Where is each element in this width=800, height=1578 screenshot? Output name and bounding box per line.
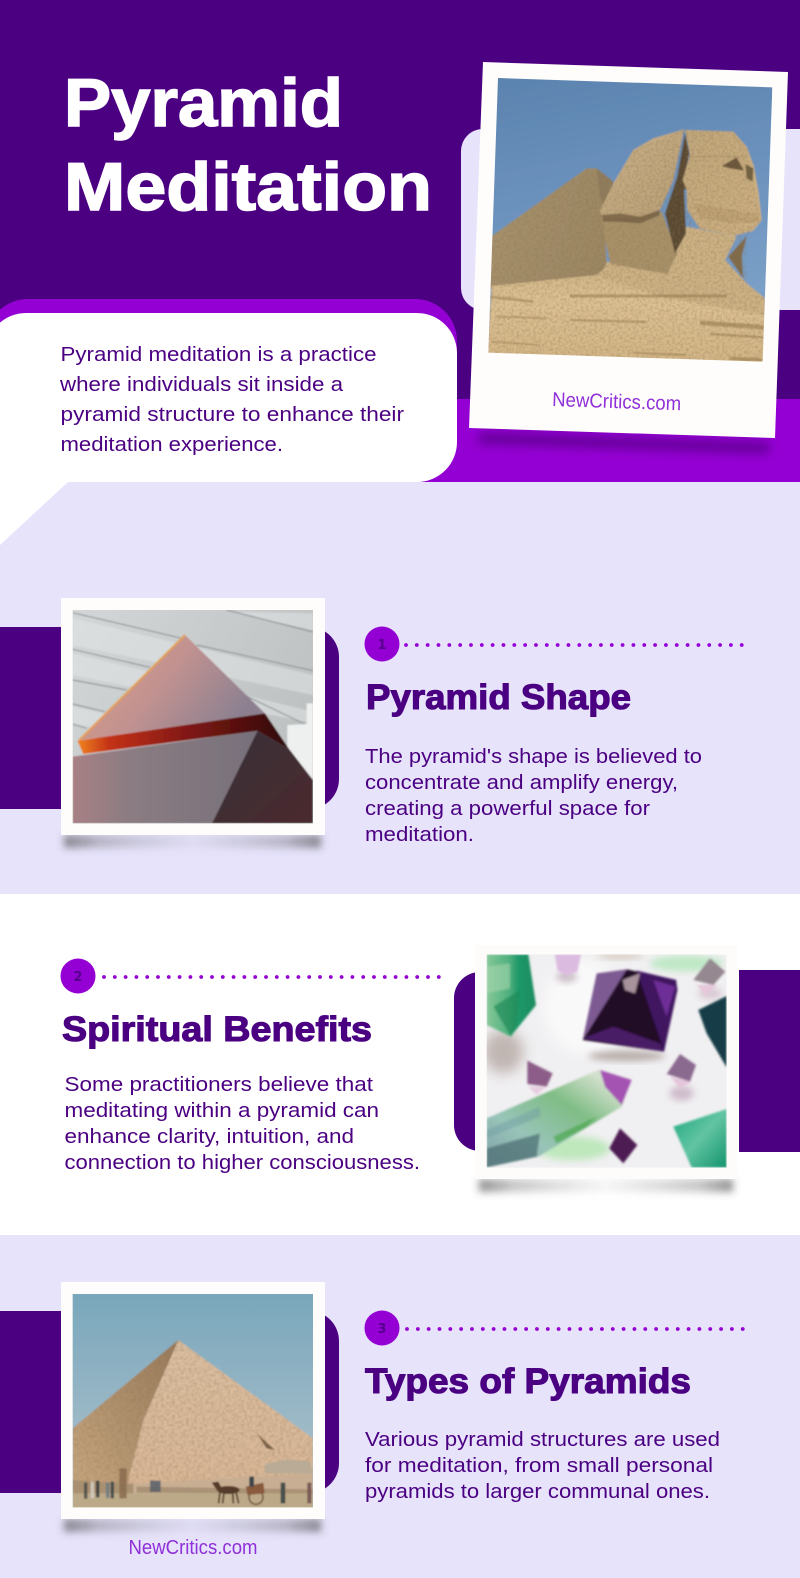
body 2: enhance clarity, intuition, and	[64, 1126, 354, 1148]
image block backing	[0, 1311, 339, 1493]
body 1: meditation.	[365, 824, 474, 846]
body 1: concentrate and amplify energy,	[365, 772, 678, 794]
watermark: NewCritics.com	[552, 389, 681, 415]
heading 3: Types of Pyramids	[365, 1361, 691, 1401]
polaroid photo: sphinx and pyramid	[469, 62, 788, 454]
photo: sphinx	[483, 73, 777, 367]
body 3: Various pyramid structures are used	[365, 1429, 720, 1451]
intro text: where individuals sit inside a	[59, 374, 344, 396]
body 3	[365, 1429, 720, 1503]
body 1: creating a powerful space for	[365, 798, 650, 820]
body 2: meditating within a pyramid can	[64, 1100, 379, 1122]
image block backing	[454, 970, 800, 1152]
photo frame	[61, 1282, 325, 1519]
photo: great pyramid	[67, 1290, 320, 1510]
body 2: connection to higher consciousness.	[64, 1152, 420, 1174]
title: Meditation	[64, 149, 432, 225]
title: Pyramid	[64, 65, 343, 141]
dotted leader 2	[104, 975, 440, 979]
intro text: pyramid structure to enhance their	[60, 404, 404, 426]
frame shadow	[64, 835, 321, 848]
body 2	[64, 1074, 420, 1174]
body 3: for meditation, from small personal	[365, 1455, 713, 1477]
section 3: types of pyramids	[0, 1282, 744, 1559]
dotted leader 1	[406, 643, 744, 647]
intro text: meditation experience.	[60, 434, 283, 456]
section 2: spiritual benefits	[60, 945, 800, 1192]
intro text	[59, 344, 404, 456]
photo frame	[475, 945, 737, 1179]
intro text: Pyramid meditation is a practice	[60, 344, 376, 366]
watermark: NewCritics.com	[128, 1537, 258, 1559]
image block backing	[0, 627, 339, 809]
dotted leader 3	[407, 1327, 744, 1331]
body 2: Some practitioners believe that	[64, 1074, 373, 1096]
body 3: pyramids to larger communal ones.	[365, 1481, 710, 1503]
step badge 3	[364, 1310, 400, 1346]
body 1	[365, 746, 702, 846]
frame shadow	[479, 1179, 733, 1192]
step badge 2	[60, 958, 96, 994]
lavender panel behind photo	[461, 129, 800, 310]
heading 1: Pyramid Shape	[366, 677, 631, 717]
step badge 1	[364, 626, 400, 662]
step badge 1: 1	[377, 638, 387, 653]
photo: crystals	[483, 953, 727, 1168]
photo: glowing pyramid	[72, 610, 313, 824]
photo frame	[61, 598, 325, 835]
intro panel	[0, 299, 457, 482]
frame shadow	[64, 1519, 321, 1532]
body 1: The pyramid's shape is believed to	[365, 746, 702, 768]
section 1: pyramid shape	[0, 598, 744, 848]
heading 2: Spiritual Benefits	[62, 1009, 372, 1049]
step badge 2: 2	[73, 970, 83, 985]
title	[64, 65, 432, 225]
step badge 3: 3	[377, 1322, 387, 1337]
